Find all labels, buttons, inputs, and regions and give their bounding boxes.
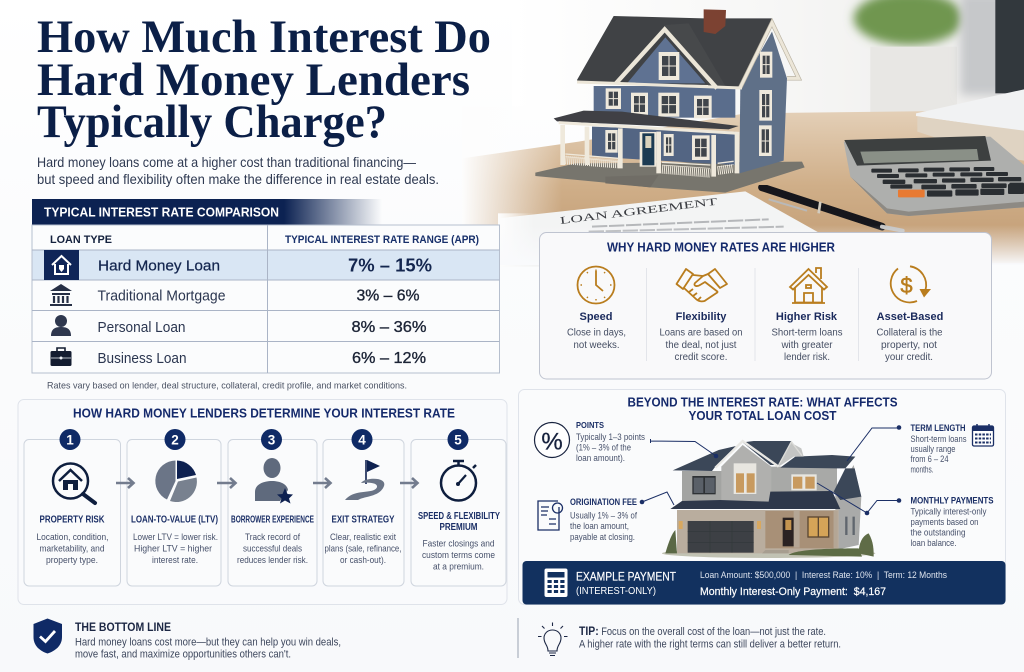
row: personal loan	[51, 315, 426, 336]
panel: typical interest rate comparison table	[32, 199, 500, 373]
row: personal loan: Personal Loan	[98, 320, 186, 336]
step 1: property risk: 1	[66, 432, 74, 448]
tip callout: A higher rate with the right terms can still deliver a better return.	[579, 638, 841, 650]
callout: origination fee: the loan amount,	[570, 521, 629, 531]
illustration: suburban house	[662, 441, 875, 558]
reason: flexibility: Loans are based on	[660, 328, 742, 338]
pen	[762, 187, 903, 231]
row: hard money loan	[44, 250, 432, 280]
step 1: property risk	[24, 429, 120, 586]
example payment bar: Loan Amount: $500,000 | Interest Rate: 10% | Term: 12 Months	[700, 570, 947, 580]
callout: points: loan amount).	[576, 453, 625, 463]
step 1: property risk: Location, condition,	[36, 532, 108, 542]
reason: higher risk: lender risk.	[784, 352, 830, 363]
title: Typically Charge?	[37, 96, 387, 148]
step 3: borrower experience	[228, 429, 317, 586]
step 1: property risk: marketability, and	[40, 544, 104, 554]
callout: origination fee: payable at closing.	[570, 532, 635, 542]
step 2: loan-to-value: Higher LTV = higher	[134, 544, 212, 554]
the bottom line callout: Hard money loans cost more—but they can help you win deals,	[75, 636, 341, 648]
example payment bar: (INTEREST-ONLY)	[576, 585, 656, 597]
step 3: borrower experience: reduces lender risk.	[237, 555, 308, 565]
callout: origination fee	[538, 492, 674, 542]
step 4: exit strategy: plans (sale, refinance,	[324, 544, 402, 554]
callout: monthly payments: loan balance.	[910, 538, 956, 548]
subtitle: Hard money loans come at a higher cost than traditional financing—	[37, 154, 416, 170]
icon: calculator	[544, 568, 568, 597]
callout: origination fee: ORIGINATION FEE	[570, 497, 637, 507]
reason: higher risk: Higher Risk	[776, 311, 838, 323]
step 2: loan-to-value: LOAN-TO-VALUE (LTV)	[131, 514, 218, 526]
step 2: loan-to-value: Lower LTV = lower risk.	[133, 532, 218, 542]
step 5: speed and flexibility premium: at a premium.	[433, 562, 484, 572]
title: How Much Interest Do	[37, 11, 491, 63]
column headings: LOAN TYPE	[50, 234, 112, 246]
loan agreement paper	[498, 191, 845, 267]
panel heading: HOW HARD MONEY LENDERS DETERMINE YOUR INTEREST RATE	[73, 406, 455, 420]
panel: why hard money rates are higher	[540, 232, 992, 379]
step 2: loan-to-value: 2	[171, 432, 179, 448]
reason: asset-based: your credit.	[885, 352, 933, 363]
the bottom line callout: move fast, and maximize opportunities others can't.	[75, 648, 291, 660]
reason: speed	[567, 266, 626, 351]
column headings: TYPICAL INTEREST RATE RANGE (APR)	[285, 234, 479, 246]
row: hard money loan: 7% – 15%	[348, 256, 432, 276]
wooden desk	[462, 110, 1024, 263]
step 2: loan-to-value: interest rate.	[152, 555, 198, 565]
reason: flexibility: credit score.	[674, 352, 728, 363]
callout: term length: TERM LENGTH	[910, 423, 966, 433]
reason: flexibility: the deal, not just	[666, 340, 737, 351]
row: traditional mortgage: Traditional Mortgage	[98, 288, 226, 304]
step 4: exit strategy: Clear, realistic exit	[330, 532, 396, 542]
row: hard money loan: Hard Money Loan	[98, 258, 220, 274]
callout: term length: Short-term loans	[910, 434, 967, 444]
step 3: borrower experience: Track record of	[245, 532, 300, 542]
panel heading: WHY HARD MONEY RATES ARE HIGHER	[607, 240, 835, 254]
subtitle: but speed and flexibility often make the difference in real estate deals.	[37, 171, 439, 187]
row: business loan: Business Loan	[98, 351, 186, 367]
hero photo: house model on desk with calculator, pen and loan agreement	[462, 0, 1024, 267]
example payment bar: EXAMPLE PAYMENT	[576, 572, 676, 584]
the bottom line callout	[34, 618, 341, 660]
example payment bar: Monthly Interest-Only Payment: $4,167	[700, 586, 886, 598]
step 5: speed and flexibility premium: Faster closings and	[422, 538, 494, 548]
tip callout: TIP: Focus on the overall cost of the loan—not just the rate.	[579, 624, 826, 638]
subtitle	[37, 154, 439, 187]
reason: flexibility	[660, 269, 742, 363]
reason: asset-based: property, not	[881, 340, 937, 351]
title	[37, 11, 491, 148]
panel heading: YOUR TOTAL LOAN COST	[688, 409, 837, 423]
step 5: speed and flexibility premium: custom terms come	[422, 550, 495, 560]
reason: asset-based: Collateral is the	[876, 328, 943, 338]
loan agreement paper: LOAN AGREEMENT	[559, 197, 719, 227]
callout: term length: months.	[910, 464, 934, 474]
step 1: property risk: PROPERTY RISK	[40, 514, 105, 526]
row: traditional mortgage	[50, 284, 420, 306]
calculator	[844, 136, 1024, 216]
step 4: exit strategy: 4	[358, 432, 366, 448]
highlighted row background	[32, 250, 499, 280]
step 5: speed and flexibility premium: PREMIUM	[440, 522, 478, 533]
step 5: speed and flexibility premium: 5	[454, 432, 462, 448]
reason: higher risk: with greater	[781, 340, 833, 351]
callout: monthly payments: Typically interest-only	[910, 506, 987, 516]
panel heading	[628, 396, 898, 423]
step 4: exit strategy: EXIT STRATEGY	[332, 514, 395, 526]
step 5: speed and flexibility premium: SPEED & FLEXIBILITY	[418, 511, 500, 522]
reason: higher risk: Short-term loans	[772, 328, 842, 338]
step 5: speed and flexibility premium	[411, 429, 506, 586]
footnote: Rates vary based on lender, deal structure, collateral, credit profile, and market conditions.	[47, 380, 407, 392]
callout: term length	[847, 423, 994, 474]
callout: monthly payments: MONTHLY PAYMENTS	[910, 496, 994, 506]
panel: how hard money lenders determine your interest rate	[18, 400, 507, 604]
callout: points	[534, 420, 718, 463]
callout: points: (1% – 3% of the	[576, 442, 631, 452]
callout: origination fee: Usually 1% – 3% of	[570, 510, 637, 520]
callout: monthly payments: the outstanding	[910, 528, 966, 538]
callout: points: POINTS	[576, 420, 604, 430]
step 4: exit strategy: or cash-out).	[340, 555, 386, 565]
icon: calendar	[972, 424, 994, 446]
panel: beyond the interest rate	[518, 390, 1006, 604]
row: traditional mortgage: 3% – 6%	[356, 288, 420, 304]
reason: flexibility: Flexibility	[676, 311, 727, 323]
step 3: borrower experience: successful deals	[243, 544, 302, 554]
example payment bar	[522, 561, 1006, 604]
the bottom line callout: THE BOTTOM LINE	[75, 622, 171, 634]
reason: asset-based: $	[900, 273, 913, 298]
callout: monthly payments	[817, 483, 994, 548]
step 1: property risk: property type.	[46, 555, 98, 565]
dark background object	[960, 0, 1024, 95]
plant and pot	[854, 0, 964, 115]
reason: asset-based	[876, 266, 943, 363]
row: personal loan: 8% – 36%	[352, 319, 426, 336]
callout: monthly payments: payments based on	[910, 517, 979, 527]
step 3: borrower experience: 3	[268, 432, 276, 448]
reason: speed: Speed	[579, 311, 613, 323]
model house	[535, 9, 805, 193]
callout: term length: from 6 – 24	[910, 454, 949, 464]
row: business loan	[50, 348, 426, 367]
step 4: exit strategy	[323, 429, 404, 586]
icon: shield with check	[34, 618, 62, 654]
book and papers	[916, 89, 1024, 161]
tip callout	[518, 618, 841, 658]
step 3: borrower experience: BORROWER EXPERIENCE	[231, 514, 314, 526]
icon: light bulb	[538, 622, 568, 656]
reason: higher risk	[772, 268, 842, 363]
table header bar: TYPICAL INTEREST RATE COMPARISON	[44, 204, 279, 220]
reason: speed: Close in days,	[567, 328, 626, 338]
table header bar	[32, 199, 382, 225]
row: business loan: 6% – 12%	[352, 350, 426, 367]
arrows between steps	[116, 478, 418, 488]
reason: speed: not weeks.	[574, 340, 620, 351]
title: Hard Money Lenders	[37, 54, 470, 106]
callout: points: %	[541, 428, 563, 456]
column headings	[50, 234, 479, 246]
panel heading: BEYOND THE INTEREST RATE: WHAT AFFECTS	[628, 396, 898, 410]
callout: points: Typically 1–3 points	[576, 432, 645, 442]
callout: term length: usually range	[910, 444, 956, 454]
reason: asset-based: Asset-Based	[877, 311, 943, 323]
step 2: loan-to-value	[127, 429, 221, 586]
